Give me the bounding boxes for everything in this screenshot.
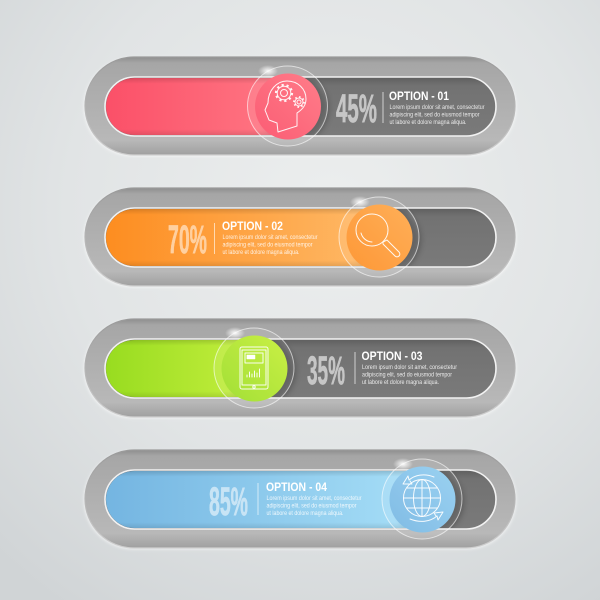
text block 03: ut labore et dolore magna aliqua.: [362, 379, 439, 386]
text block 03: adipiscing elit, sed do eiusmod tempor: [362, 372, 452, 378]
track 03: [105, 339, 496, 398]
text block 02: ut labore et dolore magna aliqua.: [222, 249, 300, 256]
divider 02: [214, 223, 215, 254]
text block 02: adipiscing elit, sed do eiusmod tempor: [222, 242, 312, 248]
icon: globe with arrows: [403, 475, 443, 521]
divider 01: [382, 92, 384, 123]
panel: option 03: [84, 319, 516, 418]
heading 04: OPTION - 04: [266, 482, 328, 494]
text block 04: adipiscing elit, sed do eiusmod tempor: [266, 502, 356, 510]
icon: magnifying glass: [356, 214, 400, 257]
text block 03: [362, 351, 457, 386]
heading 01: OPTION - 01: [389, 91, 450, 103]
text block 04: Lorem ipsum dolor sit amet, consectetur: [266, 495, 362, 502]
panel: option 01: [84, 57, 516, 156]
panel: option 02: [84, 188, 516, 287]
text block 04: [266, 482, 362, 517]
panel: option 04: 85%: [209, 480, 248, 524]
text block 03: Lorem ipsum dolor sit amet, consectetur: [362, 364, 457, 371]
panel: option 04: [84, 450, 516, 549]
panel: option 03: 35%: [307, 349, 345, 393]
fill bar 03: [106, 340, 238, 397]
badge 04: [382, 458, 463, 539]
icon: tablet with chart: [240, 347, 268, 389]
outer pill 04: [85, 450, 515, 548]
heading 03: OPTION - 03: [362, 351, 422, 363]
track 02: [105, 208, 496, 267]
percentage 01: 45%: [336, 87, 377, 131]
text block 01: Lorem ipsum dolor sit amet, consectetur: [390, 104, 484, 111]
badge 02: [339, 196, 420, 277]
text block 02: [222, 221, 318, 256]
text block 01: [389, 91, 484, 126]
track 04: [105, 470, 496, 529]
fill bar 02: [106, 209, 386, 266]
badge 03: [214, 327, 295, 408]
badge 01: [248, 65, 328, 146]
divider 04: [258, 483, 259, 515]
text block 01: ut labore et dolore magna aliqua.: [390, 119, 467, 126]
fill bar 04: [106, 471, 431, 528]
divider 03: [354, 352, 356, 384]
fill bar 01: [106, 78, 272, 135]
text block 01: adipiscing elit, sed do eiusmod tempor: [390, 112, 480, 118]
heading 02: OPTION - 02: [222, 221, 283, 233]
outer pill 03: [85, 319, 515, 417]
track 01: [105, 77, 496, 136]
panel: option 02: 70%: [168, 218, 207, 262]
icon: head with gears: [265, 81, 306, 132]
outer pill 02: [85, 188, 515, 286]
text block 04: ut labore et dolore magna aliqua.: [266, 510, 344, 517]
text block 02: Lorem ipsum dolor sit amet, consectetur: [222, 234, 318, 241]
outer pill 01: [85, 57, 515, 155]
